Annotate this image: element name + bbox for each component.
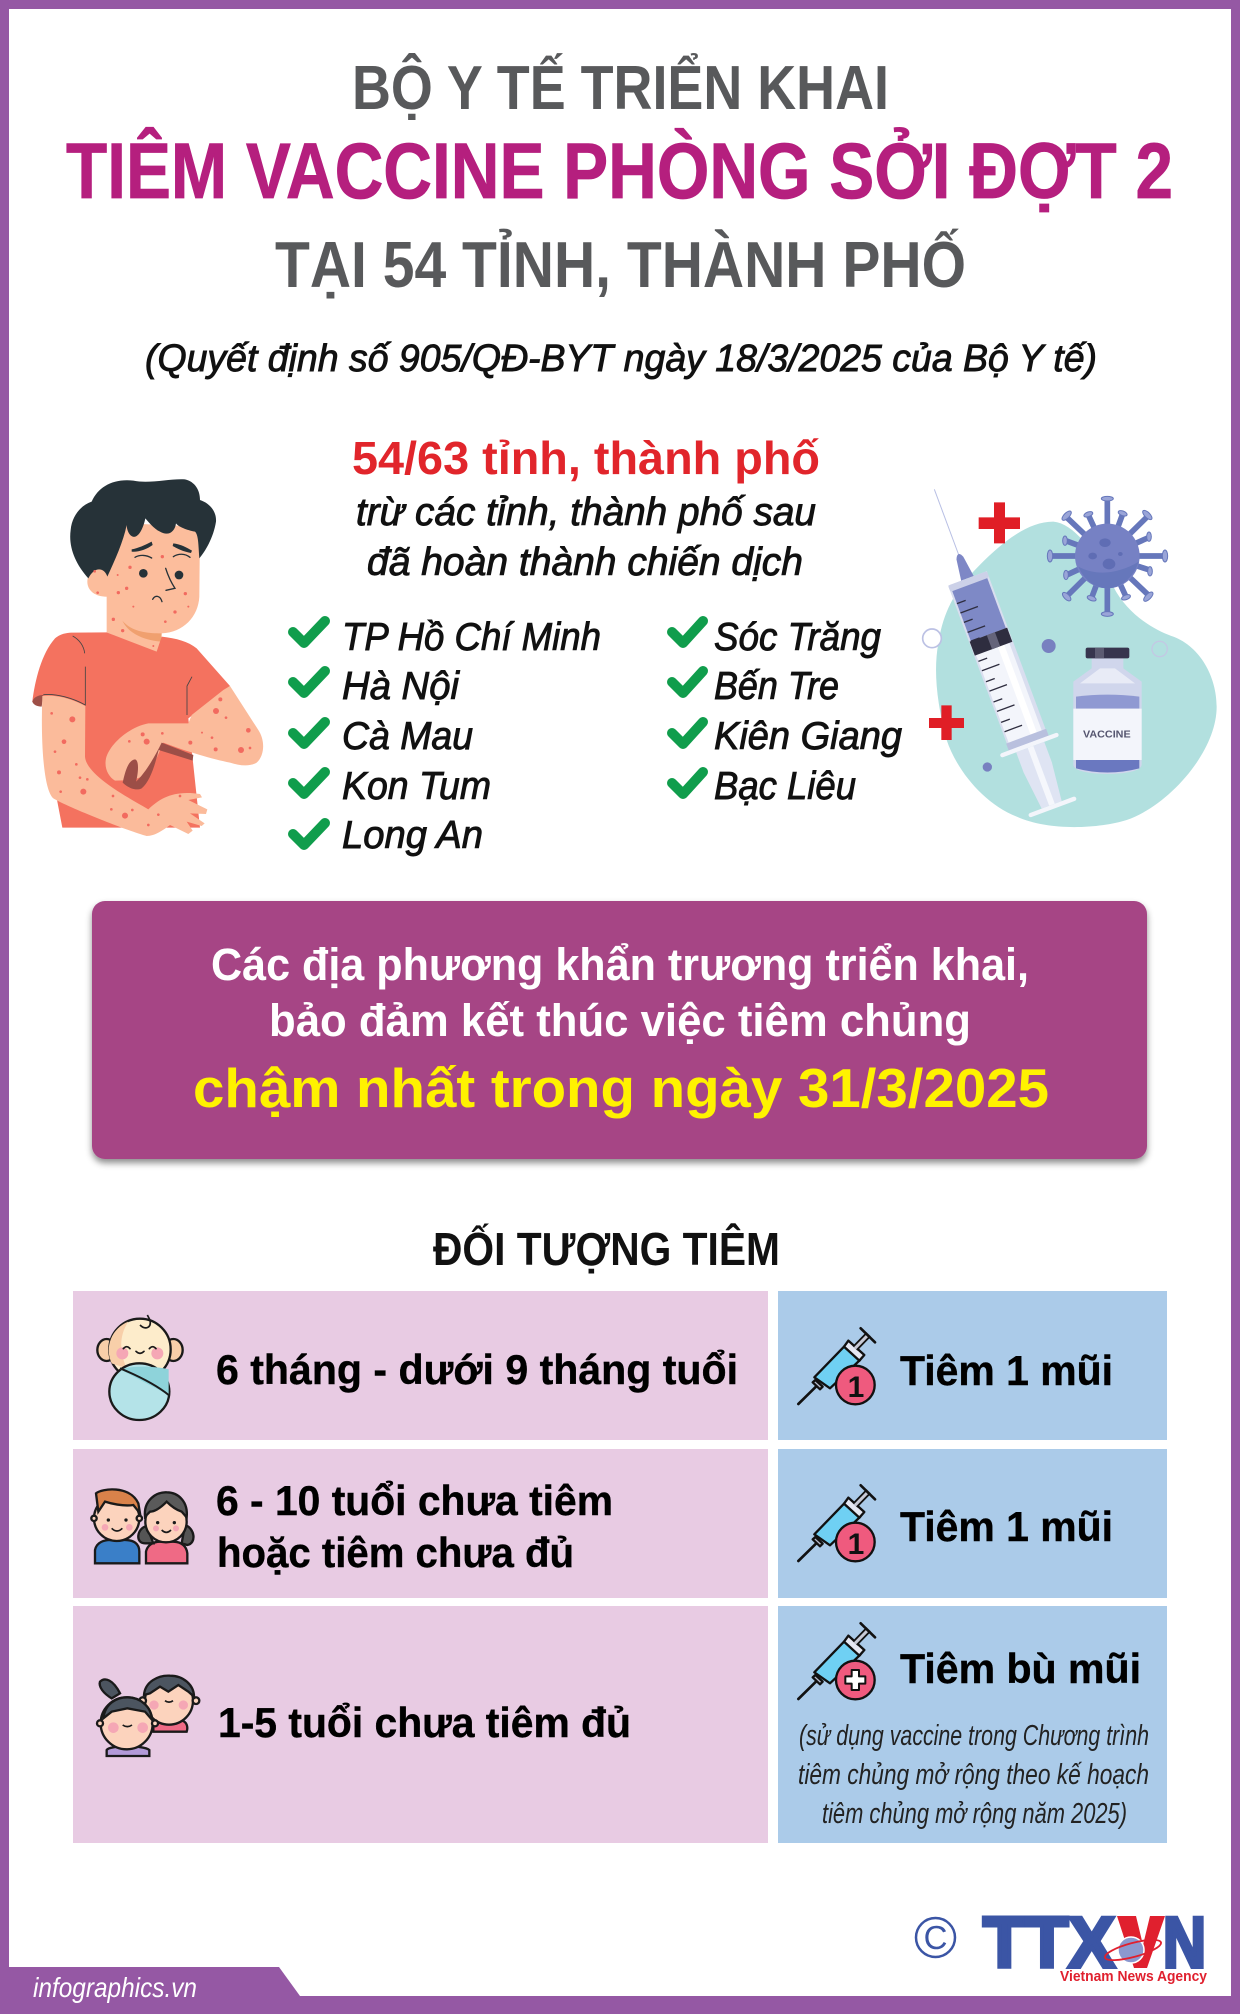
vaccine vial	[1073, 648, 1142, 774]
vial label: VACCINE	[1083, 730, 1131, 741]
left arm	[42, 696, 207, 836]
checklist: completed provinces	[293, 616, 902, 857]
row 1 age panel	[73, 1291, 768, 1440]
red V	[1117, 1916, 1165, 1968]
shirt	[32, 632, 230, 828]
age text row 2 line 1: 6 - 10 tuổi chưa tiêm	[216, 1477, 613, 1524]
hair	[70, 479, 216, 578]
section heading: target groups: ĐỐI TƯỢNG TIÊM	[433, 1223, 780, 1275]
dose text row 1: Tiêm 1 mũi	[900, 1347, 1113, 1394]
table: target groups	[73, 1291, 1167, 1843]
title line 1: BỘ Y TẾ TRIỂN KHAI	[352, 54, 889, 123]
dose text row 2: Tiêm 1 mũi	[900, 1503, 1113, 1550]
row 3 age panel	[73, 1606, 768, 1843]
note line 3: tiêm chủng mở rộng năm 2025)	[822, 1798, 1127, 1830]
note about expanded immunization	[798, 1720, 1149, 1830]
ear	[87, 567, 108, 597]
neck shadow	[122, 621, 162, 642]
exclusion line 2: đã hoàn thành chiến dịch	[367, 541, 803, 584]
decorative dots and rings	[923, 629, 1167, 772]
age text row 2 line 2: hoặc tiêm chưa đủ	[217, 1529, 574, 1576]
banner line 2: bảo đảm kết thúc việc tiêm chủng	[269, 995, 971, 1046]
province Kiên Giang: Kiên Giang	[714, 715, 902, 758]
sleeve and shirt seams	[32, 695, 43, 707]
syringe	[905, 479, 1082, 820]
neck and face	[107, 523, 200, 652]
province Sóc Trăng: Sóc Trăng	[714, 616, 881, 659]
TTX letters: TTX	[983, 1904, 1115, 1983]
right arm	[106, 686, 263, 781]
checks left column	[293, 621, 325, 845]
illustration: vaccine, syringe and virus	[905, 479, 1217, 827]
province Kon Tum: Kon Tum	[342, 765, 491, 808]
row 1 dose panel	[778, 1291, 1167, 1440]
copyright symbol	[916, 1918, 955, 1957]
badge number: 1	[848, 1528, 864, 1561]
subtitle: decision reference: (Quyết định số 905/QĐ-BYT ngày 18/3/2025 của Bộ Y tế)	[145, 338, 1097, 380]
row 2 dose panel	[778, 1449, 1167, 1598]
row 2 age panel	[73, 1449, 768, 1598]
virus	[1047, 496, 1168, 616]
footer tab	[0, 1967, 300, 2014]
globe and orbit	[1103, 1936, 1163, 1964]
rash spots	[50, 555, 251, 826]
title	[66, 54, 1173, 301]
face features	[132, 542, 192, 602]
province Long An: Long An	[342, 814, 483, 857]
deadline banner	[92, 901, 1147, 1159]
illustration: sick boy with rash	[32, 479, 263, 836]
icon: two toddlers	[97, 1676, 199, 1756]
red cross top	[979, 502, 1020, 543]
title line 3: TẠI 54 TỈNH, THÀNH PHỐ	[275, 228, 966, 301]
badge number: 1	[848, 1371, 864, 1404]
age text row 3: 1-5 tuổi chưa tiêm đủ	[218, 1699, 631, 1746]
note line 2: tiêm chủng mở rộng theo kế hoạch	[798, 1759, 1149, 1791]
copyright symbol: C	[924, 1919, 947, 1956]
age text row 1: 6 tháng - dưới 9 tháng tuổi	[216, 1346, 738, 1393]
province Cà Mau: Cà Mau	[342, 715, 473, 758]
red cross bottom	[929, 705, 964, 740]
icon: syringe with 1	[798, 1328, 875, 1404]
row 3 dose panel	[778, 1606, 1167, 1843]
banner line 1: Các địa phương khẩn trương triển khai,	[211, 939, 1029, 990]
coverage heading	[352, 432, 820, 584]
province TP Hồ Chí Minh: TP Hồ Chí Minh	[342, 616, 601, 659]
teal blob	[936, 522, 1217, 827]
checks right column	[672, 621, 703, 794]
N letter: N	[1163, 1904, 1206, 1983]
exclusion line 1: trừ các tỉnh, thành phố sau	[356, 491, 816, 534]
icon: syringe with 1	[798, 1485, 875, 1561]
province Bến Tre: Bến Tre	[714, 665, 839, 708]
website label: infographics.vn	[33, 1972, 197, 2003]
agency name: Vietnam News Agency	[1060, 1968, 1208, 1985]
red headline: 54/63 tỉnh, thành phố	[352, 432, 820, 484]
logo: copyright and TTXVN	[916, 1904, 1208, 1985]
icon: swaddled baby	[97, 1315, 183, 1420]
banner deadline: chậm nhất trong ngày 31/3/2025	[193, 1057, 1049, 1119]
icon: boy and girl	[91, 1489, 193, 1563]
province Hà Nội: Hà Nội	[342, 665, 460, 708]
dark hand gap	[123, 743, 193, 789]
dose text row 3: Tiêm bù mũi	[900, 1645, 1141, 1692]
icon: syringe with plus	[798, 1623, 875, 1699]
province Bạc Liêu: Bạc Liêu	[714, 765, 856, 808]
